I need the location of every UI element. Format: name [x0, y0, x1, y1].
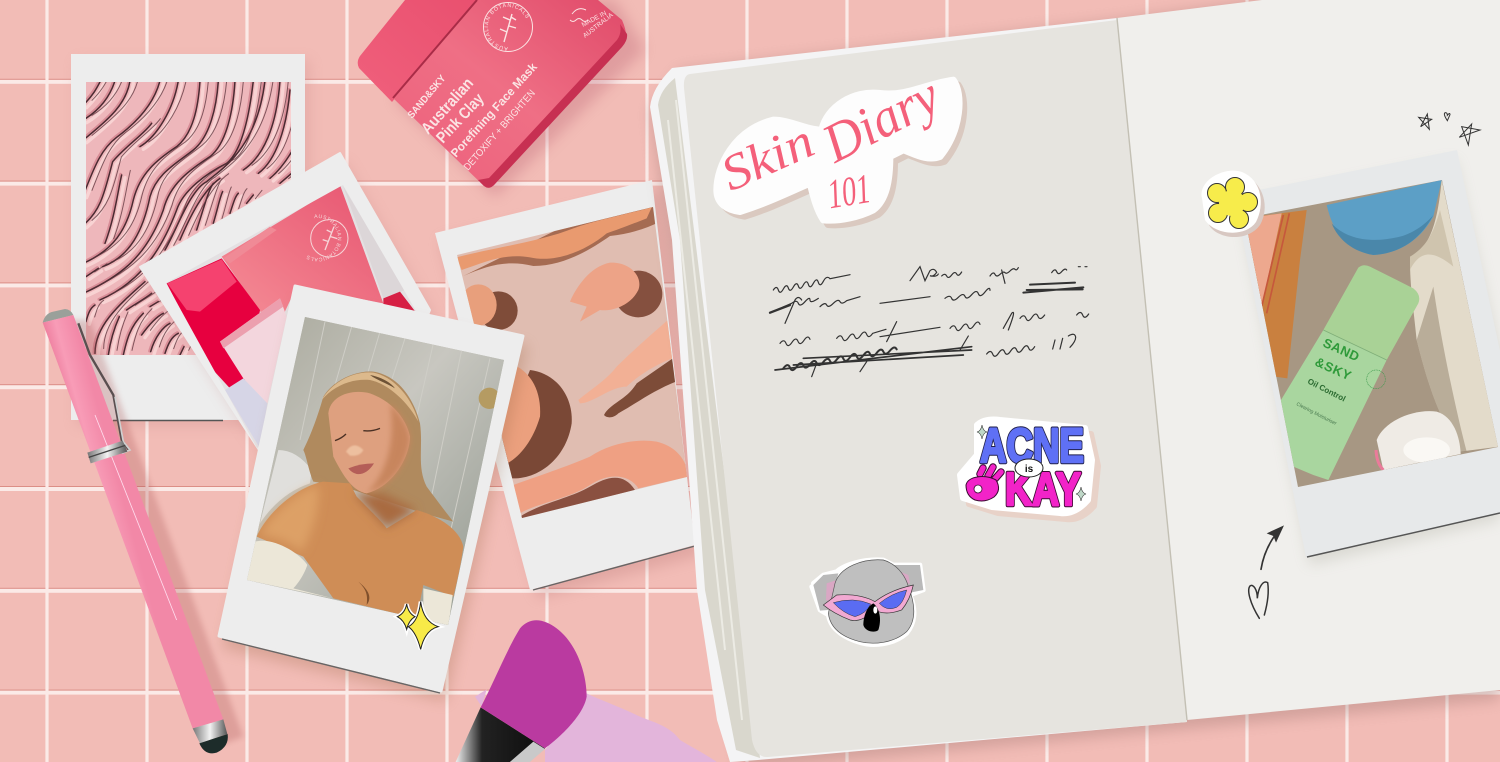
left page	[684, 20, 1187, 757]
sticker: Acne is Okay: KAY	[1005, 463, 1081, 515]
jar label text: AUSTRALIA	[582, 11, 615, 40]
blue jar	[1327, 180, 1442, 255]
sun icon	[570, 9, 588, 22]
sticker: Skin Diary title: Skin	[712, 112, 822, 202]
polaroid: pink tube product: AUSTRALIAN BOTANICALS	[306, 214, 342, 262]
pen cap top	[43, 309, 73, 323]
product: tube	[222, 185, 383, 315]
lilac cream swatch	[475, 689, 718, 762]
green tube	[1323, 265, 1419, 360]
notebook	[650, 0, 1500, 762]
cover edge	[650, 18, 1187, 762]
jar lid	[358, 0, 477, 102]
wall ornament	[478, 388, 498, 409]
jar label text: Australian	[418, 75, 477, 138]
sticker: Acne is Okay: ACNE	[980, 420, 1084, 473]
doodle: arrow	[1261, 525, 1284, 569]
sticker: Acne is Okay: KAY	[1005, 463, 1081, 515]
jar label text	[406, 10, 615, 173]
sticker: Acne is Okay: ACNE	[980, 420, 1084, 473]
pillow	[260, 450, 312, 523]
tube label text	[1295, 335, 1362, 427]
jar label text: Porefining Face Mask	[448, 60, 540, 160]
sticker: Acne is Okay: is	[1025, 464, 1034, 475]
jar body	[393, 0, 626, 188]
cream jar	[1377, 411, 1461, 470]
jar label text: MADE IN	[581, 10, 608, 29]
polaroid: pink tube product	[139, 152, 431, 450]
pen tip	[193, 719, 227, 743]
makeup brush	[455, 620, 587, 762]
pen clip	[78, 323, 129, 451]
white bottle	[1410, 180, 1498, 452]
tube label text: SAND	[1321, 335, 1362, 364]
icon: ok hand	[966, 467, 1001, 501]
comb	[1245, 210, 1307, 378]
polaroid: swatches	[435, 180, 702, 598]
tube label text: Oil Control	[1306, 377, 1347, 404]
sticker: yellow flower	[1202, 171, 1265, 237]
handwritten scribbles	[770, 267, 1089, 377]
jar label text: DETOXIFY + BRIGHTEN	[462, 88, 538, 173]
body	[257, 482, 463, 618]
polaroid: clay texture	[71, 54, 310, 426]
pen band	[87, 441, 127, 463]
sticker: Skin Diary title: Diary	[812, 64, 949, 174]
pen	[43, 309, 243, 753]
tube label text: &SKY	[1313, 354, 1354, 383]
jar label text: Pink Clay	[433, 90, 488, 147]
hair	[303, 371, 453, 522]
right page	[1117, 0, 1500, 720]
white top	[247, 541, 333, 598]
sticker: koala	[812, 560, 923, 645]
sticker: Skin Diary title	[712, 64, 964, 225]
sticker: Skin Diary title: 101	[824, 166, 874, 218]
jar logo: AUSTRALIAN BOTANICALS	[484, 3, 529, 51]
sticker: Acne is Okay	[960, 420, 1098, 519]
pen barrel	[43, 315, 223, 728]
page stack	[658, 78, 760, 758]
polaroid: portrait	[219, 286, 528, 702]
doodle: stars and heart	[1419, 113, 1480, 145]
icon: sparkle	[397, 602, 438, 649]
jar: pink clay mask	[358, 0, 648, 196]
tube label text: Clearing Moisturiser	[1295, 401, 1338, 427]
face	[328, 392, 410, 493]
polaroid: oil control product	[1234, 150, 1500, 565]
doodle: heart	[1249, 582, 1268, 618]
jar label text: SAND&SKY	[406, 73, 449, 121]
